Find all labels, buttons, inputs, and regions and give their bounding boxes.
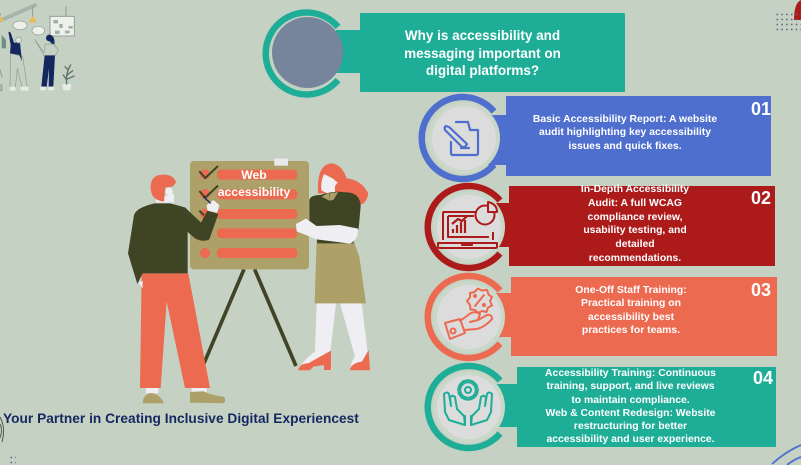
decoration: bottom-left leaf and dots: [0, 417, 16, 462]
text: panel 04: to maintain compliance.: [571, 395, 690, 406]
easel legs: [204, 269, 296, 366]
board: [190, 159, 309, 269]
check marks: [199, 166, 218, 215]
number 02: 02: [751, 188, 771, 208]
text: panel 02: compliance review,: [588, 212, 682, 223]
number 01: 01: [751, 99, 771, 119]
text: panel 04: [545, 368, 716, 445]
board title: [218, 168, 290, 198]
checklist bars: [200, 169, 297, 258]
text: panel 03: accessibility best: [588, 312, 674, 323]
icon: ring 1, document and pen: [422, 97, 508, 179]
text: panel 02: recommendations.: [589, 253, 681, 264]
decoration: top-left office illustration: [0, 5, 74, 91]
header panel: Why is accessibility and: [405, 28, 560, 43]
header panel: [360, 13, 625, 92]
icon: header ring with grey circle: [266, 13, 362, 95]
panel 02: in-depth audit: [509, 186, 775, 266]
icon: ring 4, hands with gear: [428, 366, 519, 448]
text: panel 04: Web & Content Redesign: Website: [546, 408, 715, 419]
panel 01: basic report: [506, 96, 771, 176]
man: [128, 175, 225, 403]
text: panel 02: In-Depth Accessibility: [581, 184, 689, 195]
tagline: Your Partner in Creating Inclusive Digital Experiencest: [3, 411, 359, 426]
text: panel 04: training, support, and live reviews: [546, 381, 715, 392]
panel 04: continuous training: [517, 367, 776, 447]
text: panel 03: [575, 285, 687, 336]
text: panel 02: [581, 184, 689, 264]
text: panel 01: Basic Accessibility Report: A website: [533, 114, 717, 125]
text: panel 02: Audit: A full WCAG: [588, 198, 682, 209]
text: panel 03: practices for teams.: [582, 325, 680, 336]
header panel: digital platforms?: [426, 63, 539, 78]
decoration: top-right dots and red shape: [776, 0, 801, 30]
text: panel 01: issues and quick fixes.: [568, 141, 682, 152]
text: panel 03: Practical training on: [581, 298, 681, 309]
decoration: bottom-right blue curves: [772, 445, 801, 465]
text: panel 03: One-Off Staff Training:: [575, 285, 687, 296]
illustration: two people at checklist board: [128, 159, 370, 403]
text: panel 04: Accessibility Training: Continuous: [545, 368, 716, 379]
panel 03: staff training: [511, 277, 777, 356]
woman: [296, 163, 370, 370]
board title: accessibility: [218, 184, 290, 198]
icon: ring 3, hand with badge: [428, 276, 513, 358]
text: panel 01: [533, 114, 717, 152]
number 03: 03: [751, 280, 771, 300]
text: panel 04: restructuring for better: [574, 421, 687, 432]
text: panel 02: usability testing, and: [583, 225, 687, 236]
header panel: messaging important on: [404, 46, 561, 61]
text: panel 01: audit highlighting key accessibility: [539, 127, 711, 138]
text: panel 02: detailed: [615, 239, 655, 250]
board title: Web: [241, 168, 267, 182]
number 04: 04: [753, 368, 773, 388]
icon: ring 2, laptop and charts: [428, 186, 511, 268]
text: panel 04: accessibility and user experience.: [546, 434, 715, 445]
